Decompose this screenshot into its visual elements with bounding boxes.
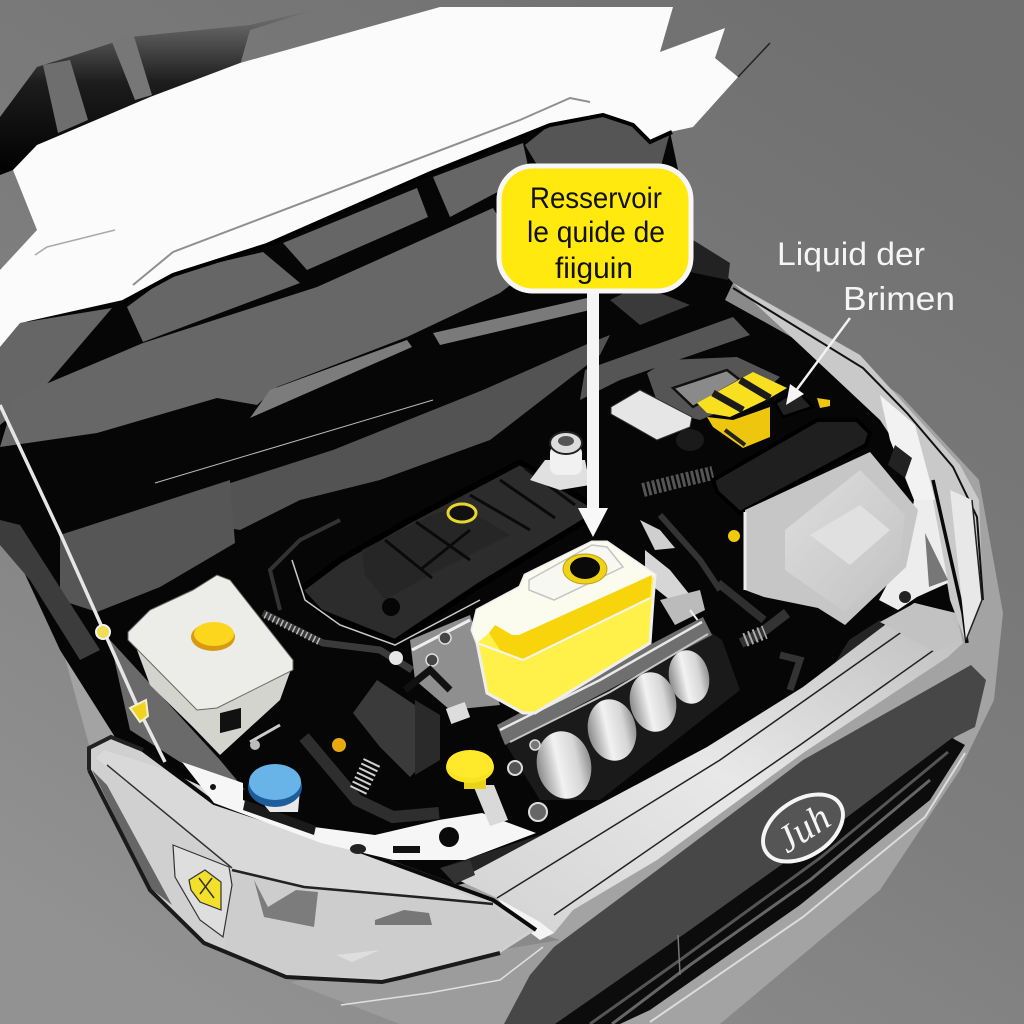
callout arrow down to reservoir	[578, 290, 608, 537]
warning symbol	[173, 845, 232, 937]
blue washer cap	[248, 764, 302, 812]
top right fuse box and battery	[611, 357, 830, 451]
cover bolt	[382, 598, 400, 616]
black battery lid	[713, 420, 870, 513]
yellow filler cap lower	[446, 750, 508, 826]
yellow callout label	[499, 166, 691, 291]
bonnet prop rod	[0, 405, 165, 762]
exhaust manifold runners	[497, 617, 740, 821]
thin label arrow	[786, 318, 850, 405]
main yellow reservoir	[472, 542, 655, 713]
engine block detail	[405, 520, 720, 724]
grille slots	[555, 738, 965, 1024]
brand badge: Juh	[769, 796, 838, 861]
car body	[60, 240, 1003, 1024]
white slam panel	[182, 762, 536, 884]
yellow battery	[697, 372, 787, 448]
small yellow cap	[332, 738, 346, 752]
bumper top strip	[458, 603, 963, 940]
reservoir cap	[191, 623, 235, 651]
front cross panel	[443, 620, 892, 882]
hoses and dark engine parts	[250, 473, 800, 817]
light grey air box	[728, 452, 918, 625]
grille panel	[504, 665, 986, 1024]
brake fluid box	[775, 390, 813, 417]
left white reservoir	[128, 575, 293, 755]
engine bay dark base	[0, 113, 956, 885]
right fender	[733, 283, 983, 643]
yellow callout label: fiiguin	[555, 252, 633, 285]
windshield corner	[0, 8, 320, 175]
headlight facets	[254, 880, 318, 927]
open hood white panel	[0, 7, 738, 347]
drain hole	[439, 827, 459, 847]
master cylinder cap	[530, 432, 590, 490]
brand badge	[751, 781, 855, 875]
underside of hood panels	[0, 115, 860, 790]
cover logo	[448, 504, 476, 522]
hood crease lines	[35, 43, 770, 302]
white label text: Liquid der	[777, 236, 925, 272]
left headlight and fender	[89, 737, 536, 982]
white label text	[777, 236, 955, 317]
yellow callout label: le quide de	[527, 216, 665, 249]
engine cover	[300, 462, 592, 642]
white label text: Brimen	[843, 280, 955, 317]
yellow callout label: Resservoir	[530, 182, 662, 215]
